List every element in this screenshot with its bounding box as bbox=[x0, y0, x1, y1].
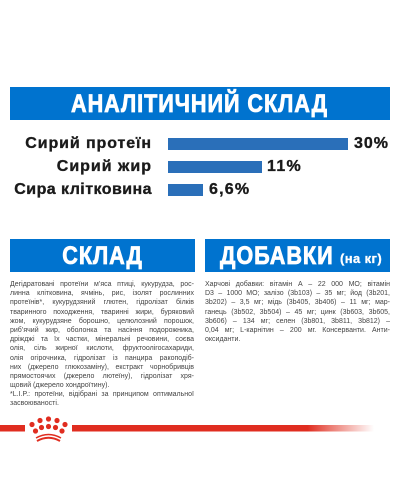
text block: ingredients: тваринного походження, тваринні жири, буряковий bbox=[10, 309, 194, 316]
text block: ingredients: жом, кукурудзяне борошно, целюлозний порошок, bbox=[10, 318, 194, 325]
bar: crude fat bbox=[168, 161, 262, 173]
line right bbox=[72, 425, 374, 432]
heading: additives: (на кг) bbox=[340, 251, 382, 266]
text block: additives: оксиданти. bbox=[205, 336, 240, 343]
text block: additives: ганець (3b502, 3b504) – 45 мг; цинк (3b603, 3b605, bbox=[205, 309, 390, 316]
red divider line with crown bbox=[0, 416, 372, 442]
text block: ingredients: Дегідратовані протеїни м’яса птиці, кукурудза, рос- bbox=[10, 281, 194, 288]
text block: ingredients bbox=[10, 280, 194, 407]
heading: composition bbox=[10, 239, 195, 272]
text block: ingredients: засвоюваності. bbox=[10, 400, 59, 407]
text block: additives bbox=[205, 280, 390, 343]
bar: crude protein bbox=[168, 138, 348, 150]
text block: ingredients: дріжджі та їх частки, мінеральні речовини, соєва bbox=[10, 336, 194, 343]
line left bbox=[0, 425, 25, 432]
text block: additives: Харчові добавки: вітамін А – 22 000 МО; вітамін bbox=[205, 281, 390, 288]
label: crude protein: Сирий протеїн bbox=[25, 135, 152, 152]
label: crude fibre: Сира клітковина bbox=[14, 181, 152, 198]
text block: ingredients: прямостоячих (джерело лютеїну), гідролізат хря- bbox=[10, 373, 194, 380]
value: 6,6%: 6,6% bbox=[209, 181, 250, 198]
text block: ingredients: олія, сіль жирної кислоти, фруктоолігосахариди, bbox=[10, 345, 194, 352]
text block: ingredients: олія огірочника, гідролізат із панцира ракоподіб- bbox=[10, 354, 194, 362]
text block: ingredients: них (джерело глюкозаміну), екстракт чорнобривців bbox=[10, 364, 194, 371]
text block: ingredients: риб’ячий жир, оболонка та насіння подорожника, bbox=[10, 327, 194, 334]
icon: crown bbox=[29, 416, 68, 441]
heading: analytical composition: АНАЛІТИЧНИЙ СКЛАД bbox=[72, 90, 328, 118]
value: 30%: 30% bbox=[354, 135, 389, 152]
label: crude fat: Сирий жир bbox=[57, 158, 152, 175]
bar chart bbox=[14, 135, 389, 198]
heading: composition: СКЛАД bbox=[62, 242, 143, 270]
text block: ingredients: *L.I.P.: протеїни, відібрані за принципом оптимальної bbox=[10, 391, 194, 398]
text block: ingredients: щовий (джерело хондроїтину). bbox=[10, 382, 109, 389]
text block: ingredients: линна клітковина, ячмінь, рис, ізолят рослинних bbox=[10, 290, 194, 297]
heading: analytical composition bbox=[10, 87, 390, 120]
text block: additives: D3 – 1000 МО; залізо (3b103) – 35 мг; йод (3b201, bbox=[205, 290, 390, 297]
heading: additives bbox=[205, 239, 390, 272]
bar: crude fibre bbox=[168, 184, 203, 196]
value: 11%: 11% bbox=[267, 158, 302, 175]
heading: additives: ДОБАВКИ bbox=[220, 242, 334, 270]
text block: ingredients: протеїнів*, кукурудзяний глютен, гідролізат білків bbox=[10, 299, 194, 306]
text block: additives: 3b606) – 134 мг; селен (3b801, 3b811, 3b812) – bbox=[205, 318, 390, 325]
text block: additives: 3b202) – 3,5 мг; мідь (3b405, 3b406) – 11 мг; мар- bbox=[205, 299, 390, 306]
text block: additives: 0,04 мг; L-карнітин – 200 мг. Консерванти. Анти- bbox=[205, 327, 390, 334]
